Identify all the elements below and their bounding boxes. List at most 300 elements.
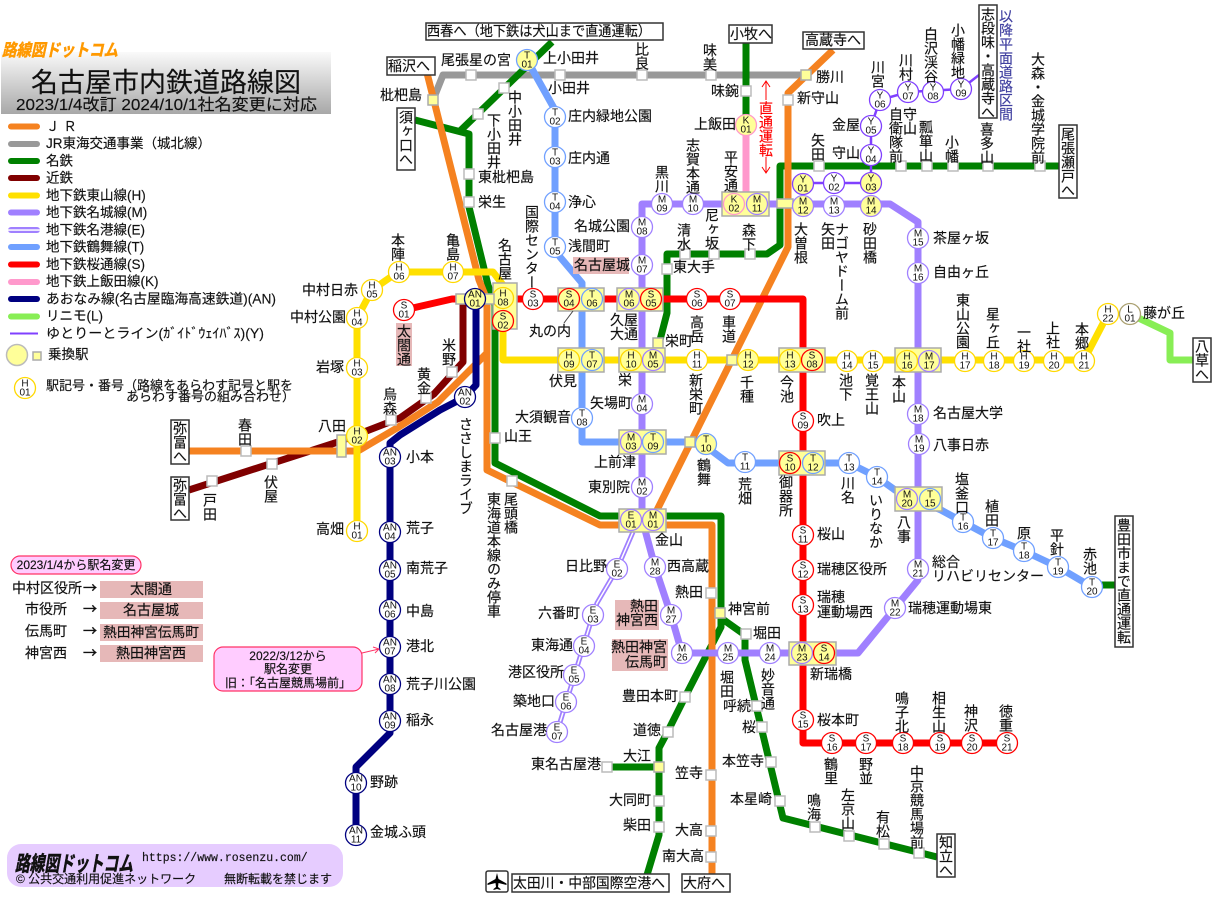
station: 東別院: 東別院: [588, 479, 630, 495]
interchange: 御器所: 12: [807, 462, 819, 474]
station: 荒畑: 11: [740, 462, 751, 472]
station: 堀田 Meitetsu: 堀田: [753, 625, 781, 641]
station: 浅間町: T: [552, 238, 558, 248]
station: 矢場町: 04: [636, 404, 648, 414]
line: JR Chuo: [657, 50, 833, 510]
station: 自由ヶ丘: 16: [912, 272, 924, 284]
stations: Meijo and Meiko lines: [491, 114, 1044, 742]
logo: 路線図ドットコム: [2, 41, 118, 60]
interchange: 栄: [618, 348, 665, 388]
station: 白沢渓谷: 白沢渓谷: [923, 27, 939, 83]
station: 鶴里: [822, 732, 842, 785]
interchange: 本山: 17: [923, 360, 935, 372]
line: Linimo: [1130, 314, 1195, 360]
station: 荒畑: [734, 452, 756, 505]
station: 志賀本通: [682, 138, 704, 214]
sign: Chiryu: 知立へ: [938, 834, 954, 877]
interchange: 丸の内: [529, 288, 604, 339]
station: 妙音通: 妙音通: [760, 668, 776, 711]
station: 亀島: 亀島: [445, 233, 461, 261]
stations: Tsurumai line: [515, 50, 1102, 598]
interchange: 金山: 01: [625, 520, 637, 530]
interchange: 金山: E: [628, 510, 635, 522]
station: 六番町: E: [590, 606, 597, 616]
station: 守山自衛隊前: 守山: [902, 107, 918, 135]
interchange: 八事: T: [927, 490, 933, 500]
interchange: 金山: 01: [647, 520, 659, 530]
interchange: 栄: M: [649, 350, 657, 362]
station: 東大手: 東大手: [673, 259, 715, 275]
station: 大須観音: T: [579, 408, 585, 420]
interchange: 上前津: [594, 430, 666, 470]
station: 桜本町: 桜本町: [817, 712, 859, 728]
station: 南荒子: [380, 560, 448, 580]
station: 上社: 20: [1048, 360, 1060, 372]
station: 妙音通: M: [766, 644, 774, 654]
station: 中村公園: 中村公園: [290, 309, 346, 325]
station: 川村: [898, 53, 918, 102]
station: 庄内通: 03: [549, 156, 561, 168]
station: 名古屋大学: [908, 404, 1003, 424]
station: 稲永: 09: [384, 720, 396, 732]
notice: 無断転載を禁じます: [224, 871, 332, 886]
transfer markers: 名古屋 Aonami: [456, 294, 494, 304]
station: 東枇杷島: 東枇杷島: [478, 169, 534, 185]
rename: 熱田神宮西: 神宮西: [25, 645, 67, 661]
station: 堀田: 堀田: [719, 670, 735, 698]
station: 高畑: H: [353, 522, 361, 532]
station: 鳴子北: [892, 691, 914, 754]
station: 亀島: 07: [447, 272, 459, 282]
legend: Kintetsu: [8, 170, 73, 186]
station: 川村: 川村: [898, 53, 914, 81]
station: 金屋: 金屋: [832, 117, 860, 133]
station: 上小田井 T01: [516, 50, 538, 70]
station: 矢場町: 矢場町: [590, 395, 632, 411]
station: 熱田神宮西: [615, 598, 682, 630]
station: 笠寺: [675, 765, 716, 781]
station: Y03: Y: [868, 174, 875, 184]
station: 中村日赤: 05: [366, 290, 378, 300]
station: 上飯田: 01: [740, 124, 752, 136]
station: 瑞穂運動場西: S: [800, 596, 807, 606]
line: Kamiiida: [742, 125, 750, 192]
line: JR Tokaido: [427, 73, 712, 875]
station: 新栄町: 新栄町: [688, 373, 704, 415]
interchange: 八事: 20: [901, 498, 913, 510]
line: Meitetsu Toyota: [1095, 582, 1116, 588]
interchange: 八事: 八事: [896, 515, 912, 543]
station: 八田 H02: [346, 426, 368, 446]
station: 大須観音: 08: [576, 418, 588, 428]
rail lines: [189, 42, 1195, 875]
station: 山王: 山王: [504, 428, 532, 444]
station: 荒畑: T: [742, 452, 748, 464]
rename: 熱田神宮西: 熱田神宮西: [116, 645, 186, 661]
callout: Minatokita rename: [214, 647, 379, 691]
note: elevated road section ends: 以降平面道路区間: [998, 9, 1014, 122]
station: 西高蔵: M: [651, 558, 659, 568]
station: 桜: [742, 719, 767, 735]
interchange: 大曽根: Y: [800, 174, 807, 186]
sign: Inazawa: 稲沢へ: [388, 58, 430, 74]
station: ナゴヤドーム前矢田: [820, 196, 850, 321]
station: 瑞穂運動場東: 瑞穂運動場東: [908, 600, 992, 616]
station: 千種: H: [744, 350, 752, 362]
rename: 名古屋城: →: [83, 599, 97, 619]
station: 神沢: 神沢: [963, 704, 979, 732]
station: 港区役所: 港区役所: [508, 664, 564, 680]
station: 喜多山: 喜多山: [979, 122, 995, 164]
interchange: 御器所: S: [787, 454, 794, 464]
interchange: 名古屋: 02: [497, 320, 509, 332]
station: 荒子川公園: 08: [384, 684, 396, 694]
station: 熱田神宮西: M: [667, 606, 675, 616]
interchange: 平安通: [722, 150, 769, 216]
station: 栄生: [464, 194, 506, 210]
station: 池下: 池下: [838, 373, 854, 401]
station: 白沢渓谷: 08: [927, 92, 939, 102]
station: 築地口: [513, 692, 576, 712]
station: 南大高: 南大高: [662, 848, 704, 864]
interchange: 今池: H: [786, 350, 794, 362]
interchange: 伏見: T: [589, 350, 595, 362]
station: 中村日赤: [302, 280, 382, 300]
interchange: 栄: 10: [625, 360, 637, 370]
station: 熱田神宮伝馬町: M: [678, 644, 686, 654]
station: 守山: 守山: [832, 145, 860, 161]
station: 神宮前: 神宮前: [728, 601, 770, 617]
interchange: 御器所: 10: [784, 462, 796, 474]
station: 塩釜口: T: [960, 512, 966, 524]
station: 瓢箪山: 瓢箪山: [918, 120, 934, 162]
station: 日比野: 日比野: [565, 558, 607, 574]
station: 吹上: [792, 410, 845, 432]
station: 庄内緑地公園: 02: [549, 116, 561, 128]
station: 野並: [856, 732, 876, 785]
station: 烏森: 烏森: [382, 386, 398, 415]
interchange: 栄: 栄: [618, 372, 632, 388]
station: 自由ヶ丘: 自由ヶ丘: [933, 264, 989, 280]
station: AN01: AN: [468, 290, 482, 300]
station: ナゴヤドーム前矢田: 13: [828, 206, 840, 216]
rename: 太閤通: 中村区役所: [12, 580, 82, 596]
station: 八事日赤: [908, 434, 989, 454]
station: 六番町: 六番町: [538, 605, 580, 621]
sign: Owari Seto: 尾張瀬戸へ: [1060, 127, 1076, 197]
legend: Meijo line: 地下鉄名城線(M): [46, 205, 147, 220]
station: 妙音通: [760, 642, 780, 711]
legend: station number explanation: H: [21, 378, 29, 390]
station: 春田: 春田: [237, 418, 253, 446]
station: 日比野: E: [614, 560, 621, 570]
station: 野並: S: [863, 734, 870, 744]
station: 平針: [1048, 528, 1068, 578]
legend: Aonami line: あおなみ線(名古屋臨海高速鉄道)(AN): [46, 290, 276, 306]
rename: 熱田神宮西: →: [83, 643, 97, 663]
interchange: 大曽根: 01: [797, 184, 809, 194]
station: 徳重: S: [1004, 734, 1011, 744]
station: 妙音通: 24: [764, 652, 776, 664]
station: 中島: 中島: [406, 603, 434, 619]
station: 砂田橋: 14: [865, 206, 877, 216]
station: 名古屋港: E: [554, 722, 561, 734]
station: 笠寺: 笠寺: [675, 765, 703, 781]
rename: 太閤通: [12, 578, 203, 598]
station: 総合リハビリセンター: 21: [912, 568, 924, 580]
legend: Higashiyama line: 地下鉄東山線(H): [46, 188, 146, 203]
station: 金屋: 05: [865, 126, 877, 136]
station: 植田: T: [990, 528, 996, 540]
station: 瑞穂運動場東: [884, 598, 992, 618]
station: 名古屋大学: 18: [912, 414, 924, 424]
legend: Meiko line: 地下鉄名港線(E): [46, 222, 145, 238]
revision date: 2023/1/4改訂 2024/10/1社名変更に対応: [16, 96, 317, 114]
station: 尾張星の宮: [441, 52, 511, 80]
station: 国際センター: 03: [527, 298, 539, 310]
legend: station number explanation: [14, 378, 295, 404]
station: 熱田神宮西: 神宮西: [616, 612, 658, 628]
station: 覚王山: 覚王山: [864, 373, 880, 415]
station: H22: H: [1104, 304, 1112, 316]
station: 高畑: 01: [351, 530, 363, 542]
station: 本笠寺: 本笠寺: [722, 753, 764, 769]
interchange: 新瑞橋: [789, 642, 852, 682]
station: 庄内緑地公園: [544, 106, 652, 128]
legend: Sakura-dori line: 地下鉄桜通線(S): [46, 257, 145, 272]
station: 池下: H: [843, 352, 851, 362]
station: 藤が丘: 藤が丘: [1143, 305, 1185, 321]
station: 中村公園: H: [353, 308, 361, 320]
station: 矢田 Seto line: 矢田: [810, 133, 826, 161]
station: 川村: 07: [902, 92, 914, 102]
station: 清水: 清水: [676, 223, 692, 251]
line: Meitetsu Inuyama branch: [460, 42, 552, 131]
transfer marker: 鶴舞: [685, 437, 695, 447]
station: 熱田神宮伝馬町: [611, 639, 692, 671]
rename: 太閤通: →: [83, 578, 97, 598]
station: ささしまライブ: 02: [459, 396, 471, 408]
station: 名城公園: 08: [636, 226, 648, 238]
station: 大高: [675, 822, 716, 838]
station: 星ヶ丘: H: [990, 352, 998, 362]
footer panel: [7, 844, 343, 887]
station: 味美: 味美: [702, 43, 718, 71]
station: 金城ふ頭: 金城ふ頭: [370, 824, 426, 840]
station: 瑞穂運動場西: 瑞穂: [817, 589, 845, 605]
line: Tsurumai: [527, 60, 1092, 587]
station: 自由ヶ丘: [908, 262, 989, 284]
interchange: 久屋大通: 05: [645, 298, 657, 310]
station: 上小田井 T01: 01: [521, 60, 533, 70]
station: 浅間町: [544, 236, 610, 258]
station: 米野: 米野: [441, 338, 457, 366]
station: 岩塚: [316, 358, 368, 378]
interchange: 平安通: 平安通: [723, 150, 739, 193]
station: 白沢渓谷: Y: [930, 82, 937, 94]
station: 鳴子北: S: [900, 734, 907, 744]
station: 名古屋大学: M: [914, 404, 922, 416]
sign: Ota river and Centrair: 太田川・中部国際空港へ: [513, 875, 665, 891]
station: 川宮: [870, 60, 890, 110]
station: 荒子川公園: [380, 674, 476, 694]
station: 野跡: 10: [350, 782, 362, 794]
station: 新守山: 新守山: [797, 90, 839, 106]
legend: Linimo: リニモ(L): [46, 308, 103, 324]
station: 比良: 比良: [634, 42, 650, 70]
station: H22: [1098, 304, 1118, 324]
transfer marker: 千種: [727, 355, 737, 365]
station: 六番町: [538, 604, 604, 626]
station: 港区役所: [508, 664, 584, 686]
station: 新栄町: [686, 350, 708, 415]
station: 志賀本通: M: [689, 194, 697, 206]
station: 上社: [1044, 321, 1064, 372]
station: 原: 18: [1018, 550, 1030, 562]
station: 勝川: 勝川: [816, 69, 844, 85]
station: 金城ふ頭: 11: [351, 834, 362, 846]
station: 車道: [720, 288, 740, 344]
station: 鳴子北: 鳴子北: [894, 691, 910, 734]
station: 矢場町: [590, 394, 652, 414]
callout: Minatokita rename: 旧：「名古屋競馬場前」: [225, 675, 351, 690]
station: ナゴヤドーム前矢田: ナゴヤドーム前: [834, 222, 850, 321]
station: 上飯田: K: [743, 116, 750, 126]
station: 桜: 桜: [742, 719, 756, 735]
station: 金城ふ頭: [346, 824, 426, 846]
station: 黄金: 黄金: [416, 366, 432, 395]
station: 大江: [623, 748, 664, 772]
interchange: 金山: [619, 509, 683, 548]
interchange: 八事: 15: [924, 498, 936, 510]
station: 名城公園: M: [638, 218, 646, 228]
interchange: 久屋大通: S: [648, 290, 655, 300]
station: 砂田橋: M: [867, 196, 875, 208]
note: through service Kamiiida: 直通運転: [758, 101, 774, 157]
stations: Yutorito line: [824, 9, 1014, 194]
station: 池下: 14: [841, 360, 853, 372]
station: 尾張星の宮: 尾張星の宮: [441, 52, 511, 68]
station: 勝川: [801, 69, 844, 85]
station: 新栄町: 11: [692, 360, 703, 370]
interchange: 伏見: 07: [586, 360, 598, 370]
station: 瑞穂運動場東: M: [891, 598, 899, 610]
interchange: 平安通: K: [731, 194, 738, 206]
callout: Minatokita rename: 駅名変更: [264, 661, 312, 676]
station: 熱田神宮伝馬町: 熱田神宮: [611, 639, 667, 655]
interchange: 丸の内: 06: [586, 298, 598, 310]
legend: Meitetsu: [8, 154, 73, 168]
rename: 熱田神宮伝馬町: 熱田神宮伝馬町: [103, 625, 199, 640]
station: 港北: 07: [384, 646, 396, 658]
station: 上小田井 T01: T: [524, 50, 530, 62]
line: Meiko double: [557, 532, 633, 732]
station: 総合リハビリセンター: M: [914, 560, 922, 570]
station: 金城ふ頭: AN: [349, 826, 363, 836]
copyright: © 公共交通利用促進ネットワーク: [16, 872, 196, 886]
station: 小本: AN: [383, 448, 397, 458]
station: 中島: [380, 600, 434, 620]
station: 浄心: 04: [549, 202, 561, 212]
station: 鳴子北: 18: [897, 742, 909, 754]
line: Meitetsu Chikko: [607, 764, 659, 770]
station: 瑞穂区役所: 12: [797, 570, 809, 580]
station: 塩釜口: 塩釜口: [954, 472, 970, 514]
station: 本陣: 本陣: [390, 233, 406, 261]
station: 八田: 八田: [318, 418, 346, 434]
line: Meitetsu Seto: [660, 166, 1060, 340]
station: 港北: AN: [383, 638, 397, 648]
station: 鶴里: 鶴里: [823, 757, 839, 785]
station: 庄内緑地公園: T: [552, 108, 558, 118]
station: 覚王山: 15: [867, 360, 879, 372]
station: 名古屋大学: 名古屋大学: [933, 405, 1003, 421]
station: 八事日赤: 八事日赤: [933, 437, 989, 453]
station: 高岳: [686, 288, 708, 343]
line: Meijo: [642, 204, 918, 653]
rename: 名古屋城: 名古屋城: [123, 602, 179, 618]
station: 堀田: M: [724, 644, 732, 654]
interchange: 丸の内: T: [589, 290, 595, 300]
station: 中島: AN: [383, 600, 397, 612]
station: 熱田: 熱田: [675, 584, 703, 600]
interchange: 本山: 本山: [891, 375, 907, 403]
station: 中村公園: [290, 308, 368, 328]
station: ささしまライブ: AN: [458, 388, 472, 398]
interchange: 御器所: 御器所: [778, 475, 794, 517]
station: 国際センター: [522, 205, 544, 310]
legend: JR Tokai Transport: JR東海交通事業（城北線）: [46, 136, 211, 151]
station: 名城公園: 名城公園: [574, 218, 630, 234]
station: 中村公園: 04: [351, 318, 363, 328]
station: 黒川: 09: [656, 204, 668, 214]
line: JR Kansai: [189, 352, 488, 451]
station: 瑞穂区役所: 瑞穂区役所: [817, 561, 887, 577]
station: 東別院: 02: [636, 486, 648, 498]
station: 稲永: 稲永: [406, 712, 434, 728]
station: 平針: 平針: [1049, 528, 1065, 556]
station: 藤が丘: L: [1127, 304, 1133, 316]
station: 鶴里: S: [829, 734, 836, 744]
station: 東海通: 04: [578, 646, 590, 656]
line: Yutorito: [803, 75, 979, 183]
station: 熱田神宮西: 27: [665, 614, 677, 626]
station: 太閤通: S: [401, 300, 408, 312]
station: 本郷: [1074, 322, 1094, 372]
station: 国際センター: 国際センター: [524, 205, 540, 289]
rename: 熱田神宮伝馬町: 伝馬町: [25, 623, 67, 639]
station: 茶屋ヶ坂: 茶屋ヶ坂: [933, 230, 989, 246]
legend: Kintetsu: 近鉄: [46, 170, 73, 186]
interchange: 上前津: 03: [625, 442, 637, 452]
interchange: 栄: 05: [647, 360, 659, 370]
station: 岩塚: 岩塚: [316, 359, 344, 375]
station: 大高: 大高: [675, 822, 703, 838]
station: 桜山: 11: [798, 534, 809, 546]
station: 栄町: 栄町: [665, 333, 693, 349]
interchange: 金山: M: [649, 510, 657, 522]
station: 枇杷島: [380, 87, 438, 105]
station: 名古屋城: [573, 254, 652, 276]
station: 大同町: 大同町: [609, 792, 651, 808]
station: 本郷: H: [1080, 352, 1088, 362]
station: 植田: [982, 498, 1004, 548]
header panel: [1, 41, 331, 114]
station: 自由ヶ丘: M: [914, 264, 922, 274]
station: ナゴヤドーム前矢田: M: [830, 196, 838, 208]
interchange: 金山: 金山: [655, 532, 683, 548]
interchange: 大曽根: [792, 174, 814, 264]
